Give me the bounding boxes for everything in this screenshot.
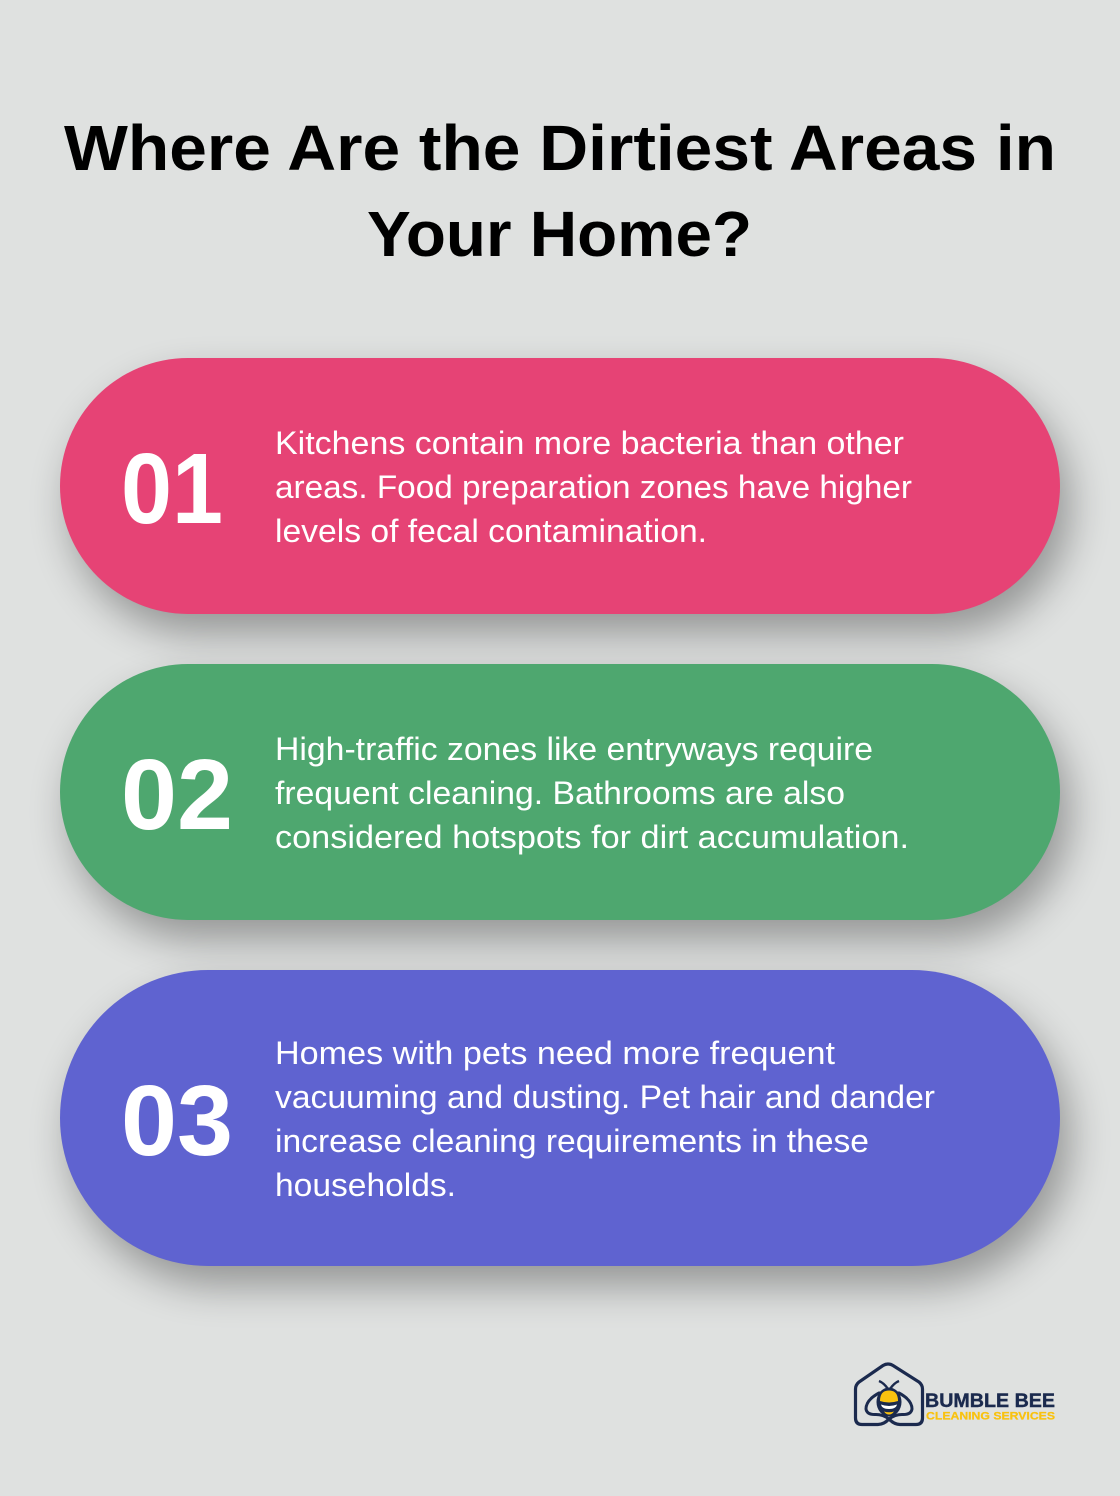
text: kitchens: areas. Food preparation zones have higher: [275, 469, 912, 505]
logo tagline: CLEANING SERVICES: [926, 1410, 1055, 1422]
text: kitchens: levels of fecal contamination.: [275, 513, 707, 549]
text: high-traffic zones: frequent cleaning. Bathrooms are also: [275, 775, 845, 811]
logo wordmark: BUMBLE BEE: [925, 1390, 1055, 1412]
text: pets: [275, 1035, 935, 1203]
title: Where Are the Dirtiest Areas in: [64, 112, 1056, 184]
number 02: 02: [121, 739, 233, 851]
panel: card 03 pets: [60, 970, 1070, 1286]
title: Your Home?: [367, 198, 752, 270]
text: pets: increase cleaning requirements in these: [275, 1123, 869, 1159]
panel: card 02 high-traffic zones: [60, 664, 1070, 940]
text: pets: households.: [275, 1167, 456, 1203]
text: pets: vacuuming and dusting. Pet hair and dander: [275, 1079, 935, 1115]
number 03: 03: [121, 1065, 233, 1177]
text: kitchens: Kitchens contain more bacteria than other: [275, 425, 904, 461]
text: high-traffic zones: High-traffic zones like entryways require: [275, 731, 873, 767]
icon: bee in house: [856, 1364, 922, 1424]
logo: Bumble Bee Cleaning Services: [856, 1364, 1055, 1424]
text: kitchens: [275, 425, 912, 549]
text: high-traffic zones: [275, 731, 909, 855]
number 01: 01: [121, 433, 223, 545]
panel: card 01 kitchens: [60, 358, 1070, 634]
title: [64, 112, 1056, 270]
text: high-traffic zones: considered hotspots for dirt accumulation.: [275, 819, 909, 855]
text: pets: Homes with pets need more frequent: [275, 1035, 835, 1071]
